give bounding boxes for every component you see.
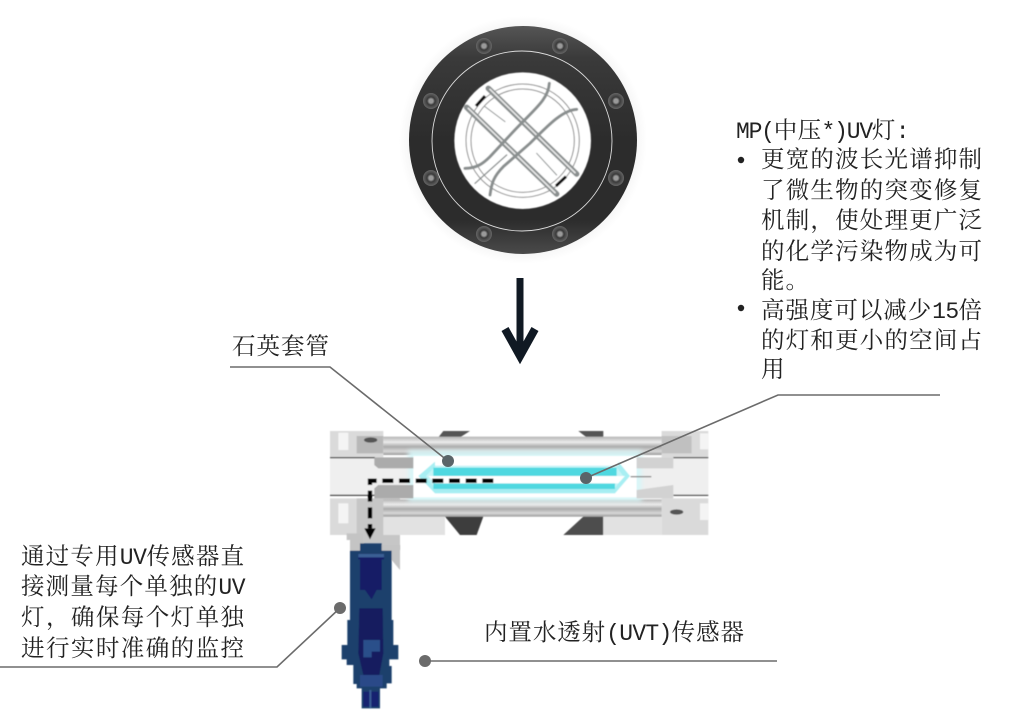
UV lamp (418, 461, 630, 493)
callout: per-lamp UV sensor text: 通过专用UV传感器直 (21, 537, 244, 571)
label: built-in UVT sensor: 内置水透射(UVT)传感器 (484, 613, 744, 647)
lower flange blocks (330, 498, 383, 535)
callout: MP UV lamp text: 能。 (761, 261, 809, 295)
leader: UV sensor (0, 602, 346, 667)
leader: UVT sensor (419, 655, 777, 667)
leader: UV lamp (580, 395, 940, 484)
callout: MP UV lamp text: 高强度可以减少15倍 (761, 291, 982, 325)
callout: MP UV lamp text: 机制，使处理更广泛 (761, 201, 982, 235)
callout: MP UV lamp text: MP(中压*)UV灯: (736, 111, 908, 145)
flange disc (409, 26, 637, 254)
callout: per-lamp UV sensor text: 进行实时准确的监控 (21, 629, 244, 663)
lower chamber (358, 608, 383, 675)
diagram: reactor cross section (330, 431, 708, 550)
outer casing (342, 543, 398, 708)
callout: per-lamp UV sensor text: 灯，确保每个灯单独 (21, 598, 246, 632)
callout: MP UV lamp text: 更宽的波长光谱抑制 (761, 140, 982, 174)
callout: per-lamp UV sensor text: 接测量每个单独的UV (21, 567, 246, 601)
reactor window with crossed lamps (454, 72, 591, 209)
dark arcs (438, 431, 470, 437)
upper chamber (358, 554, 384, 599)
water channel with glow (330, 458, 708, 495)
callout: MP UV lamp text: 用 (761, 350, 784, 384)
callout: per-lamp UV sensor text (21, 537, 246, 663)
connectors (374, 457, 413, 468)
halo around flange (399, 16, 647, 264)
arrow: down from end view to cross-section (505, 278, 535, 356)
bolts (423, 38, 624, 242)
thin ring (432, 51, 612, 231)
callout: MP UV lamp text (736, 111, 982, 384)
upper flange blocks (330, 431, 383, 457)
callout: MP UV lamp text: 了微生物的突变修复 (761, 171, 982, 205)
dashed flow path (364, 481, 493, 539)
callout: MP UV lamp text: 的化学污染物成为可 (761, 232, 982, 266)
callout: MP UV lamp text: 的灯和更小的空间占 (761, 321, 982, 355)
label: quartz sleeve: 石英套管 (232, 327, 329, 361)
diagram: UV sensor housing (342, 533, 400, 708)
icon: UV reactor end view (399, 16, 647, 264)
leader: quartz sleeve (230, 367, 454, 467)
